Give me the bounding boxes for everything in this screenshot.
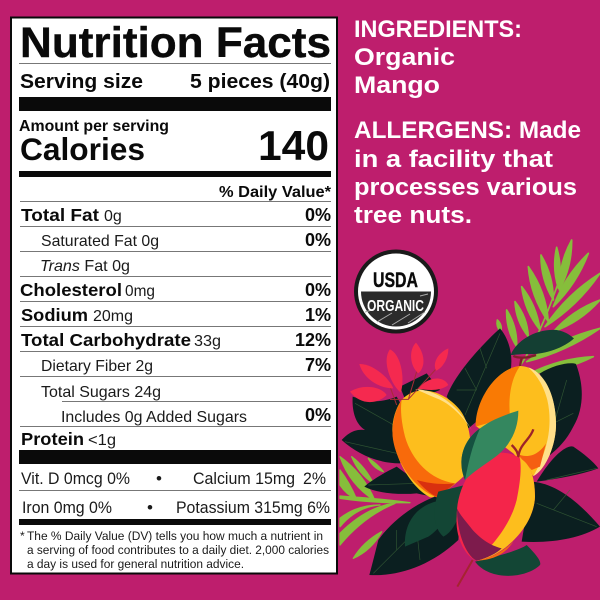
row: total carbohydrate: Total Carbohydrate <box>21 330 191 350</box>
row: total sugars: Total Sugars 24g <box>41 384 161 401</box>
row: total carbohydrate: 12% <box>295 330 331 350</box>
serving size row: 5 pieces (40g) <box>190 70 330 93</box>
row: iron and potassium: Potassium 315mg 6% <box>176 498 330 517</box>
illustration: palm fronds lower left <box>340 457 410 558</box>
row: vitamin D and calcium: Vit. D 0mcg 0% <box>21 469 130 488</box>
row: total fat: 0% <box>305 205 331 225</box>
ingredients text: Organic <box>354 44 455 71</box>
row: protein: Protein <box>21 429 84 449</box>
row: added sugars: 0% <box>305 405 331 425</box>
allergens text: in a facility that <box>354 146 553 173</box>
heading: Nutrition Facts: Nutrition Facts <box>20 19 331 67</box>
allergens text: ALLERGENS: Made <box>354 117 581 144</box>
illustration: back-right mango <box>476 355 556 476</box>
row: iron and potassium: • <box>147 498 153 517</box>
footnote: The % Daily Value (DV) tells you how much a nutrient in <box>27 529 323 543</box>
row: sodium: Sodium <box>21 305 88 325</box>
serving size row <box>20 70 330 93</box>
row: cholesterol: 0% <box>305 280 331 300</box>
allergens text <box>354 117 581 229</box>
ingredients text: INGREDIENTS: <box>354 16 522 43</box>
row: total carbohydrate <box>21 330 331 350</box>
row: protein <box>21 429 116 449</box>
icon: USDA organic seal <box>354 250 438 334</box>
row: iron and potassium: Iron 0mg 0% <box>22 498 112 517</box>
illustration: center green leaf <box>461 411 518 480</box>
calories row: 140 <box>258 122 329 169</box>
row: iron and potassium <box>22 498 330 517</box>
row: cholesterol <box>20 280 331 300</box>
footnote: a day is used for general nutrition advice. <box>27 557 244 571</box>
allergens text: tree nuts. <box>354 202 472 229</box>
row: trans fat: Trans Fat 0g <box>40 258 130 275</box>
row: total fat <box>21 205 331 225</box>
row: vitamin D and calcium: Calcium 15mg <box>193 469 295 488</box>
allergens text: processes various <box>354 174 577 201</box>
row: cholesterol: 0mg <box>125 283 155 300</box>
illustration: mangoes and leaves <box>340 240 600 587</box>
row: dietary fiber: Dietary Fiber 2g <box>41 358 153 375</box>
row: sodium: 1% <box>305 305 331 325</box>
row: protein: <1g <box>88 432 116 449</box>
row: dietary fiber: 7% <box>305 355 331 375</box>
illustration: leaf veins <box>345 333 597 573</box>
footnote: * <box>20 529 25 543</box>
row: total carbohydrate: 33g <box>194 333 221 350</box>
row: sodium: 20mg <box>93 308 133 325</box>
illustration: dark leaves <box>342 328 600 575</box>
row: cholesterol: Cholesterol <box>20 280 122 300</box>
illustration: front red mango <box>456 429 535 587</box>
illustration: lower green leaves <box>405 485 540 576</box>
row: vitamin D and calcium: 2% <box>303 469 326 488</box>
daily value header: % Daily Value* <box>219 184 332 201</box>
illustration: left mango <box>392 391 471 497</box>
row: dietary fiber <box>41 355 331 375</box>
footnote: a serving of food contributes to a daily diet. 2,000 calories <box>27 543 329 557</box>
row: added sugars <box>61 405 331 426</box>
row: total fat: 0g <box>104 208 122 225</box>
icon: USDA organic seal: USDA <box>373 269 418 292</box>
row: sodium <box>21 305 331 325</box>
illustration: top green leaf <box>511 330 574 355</box>
calories row <box>20 122 329 169</box>
panel: nutrition facts label <box>11 18 337 574</box>
row: saturated fat: Saturated Fat 0g <box>41 233 159 250</box>
amount per serving: Amount per serving <box>19 118 169 135</box>
row: vitamin D and calcium: • <box>156 469 162 488</box>
row: vitamin D and calcium <box>21 469 326 488</box>
footnote <box>20 529 329 571</box>
calories row: Calories <box>20 131 145 167</box>
ingredients text: Mango <box>354 72 440 99</box>
ingredients text <box>354 16 522 99</box>
illustration: palm fronds upper right <box>497 240 600 373</box>
illustration: red flower <box>350 343 448 405</box>
serving size row: Serving size <box>20 70 143 93</box>
row: total fat: Total Fat <box>21 205 99 225</box>
row: added sugars: Includes 0g Added Sugars <box>61 409 247 426</box>
icon: USDA organic seal: ORGANIC <box>367 298 424 315</box>
row: saturated fat <box>41 230 331 250</box>
row: saturated fat: 0% <box>305 230 331 250</box>
